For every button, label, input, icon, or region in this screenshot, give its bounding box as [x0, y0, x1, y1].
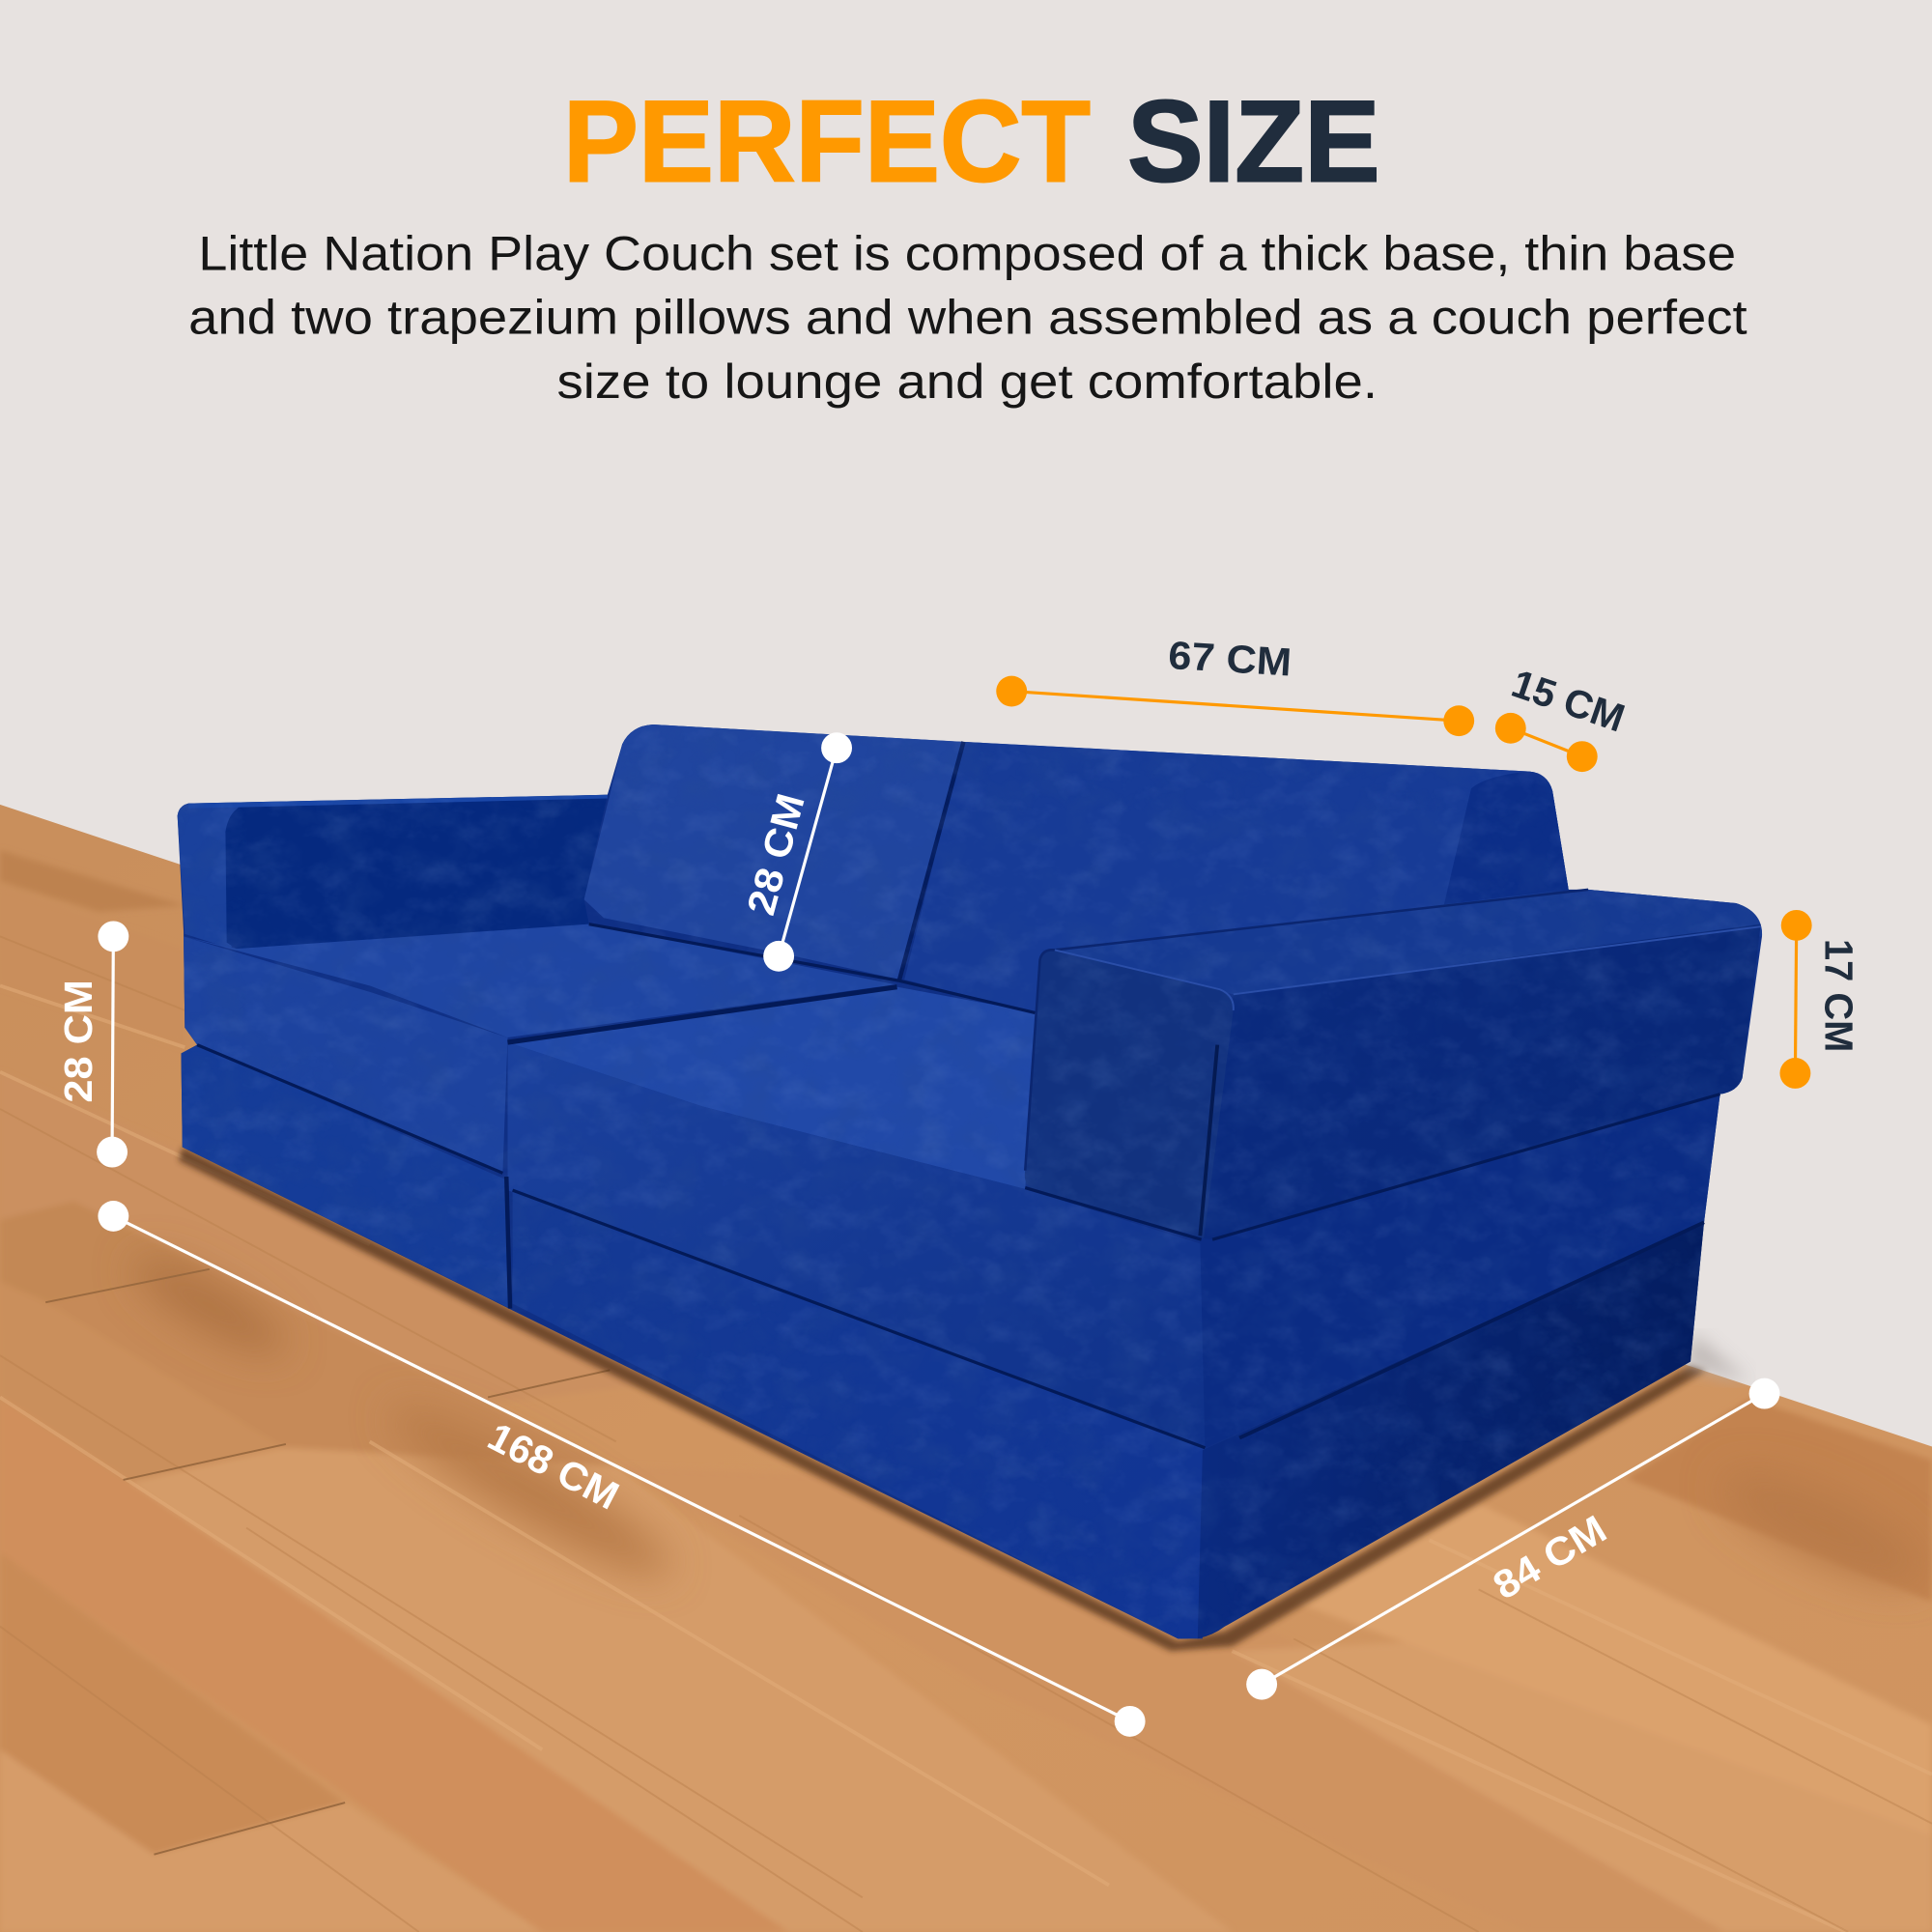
right arm side — [1200, 924, 1761, 1239]
title: PERFECT — [563, 76, 1091, 206]
sofa shadow on floor — [179, 1148, 1707, 1651]
wall shadow behind sofa — [1686, 1333, 1749, 1382]
zipper — [1200, 1045, 1217, 1236]
dimension: 67 CM: 67 CM — [1167, 633, 1293, 685]
dimension: 28 CM base height: 28 CM — [56, 980, 100, 1103]
floor plank seams — [45, 1269, 610, 1855]
floor plank bands — [0, 850, 1932, 1932]
left arm end — [178, 804, 241, 949]
description text: Little Nation Play Couch set is composed of a thick base, thin base — [198, 226, 1736, 280]
right seat front — [508, 1042, 1205, 1448]
dimension: 15 CM: 15 CM — [1506, 661, 1631, 741]
dimension: 28 CM cushion height: 28 CM — [738, 789, 813, 920]
dimension: 28 CM base height — [56, 921, 128, 1168]
couch seams — [197, 924, 1720, 1448]
velvet texture overlays — [160, 715, 1775, 1651]
dimension: 28 CM cushion height — [738, 732, 852, 972]
right seat top — [508, 987, 1037, 1189]
wooden floor — [0, 788, 1932, 1932]
description text: size to lounge and get comfortable. — [557, 355, 1378, 409]
dimension: 17 CM: 17 CM — [1817, 939, 1861, 1052]
floor dark wood patches — [141, 1259, 1893, 1590]
title: SIZE — [1127, 76, 1380, 206]
couch silhouette underlay — [178, 724, 1762, 1639]
dimension: 67 CM — [996, 633, 1474, 736]
dimension: 84 CM — [1246, 1378, 1779, 1700]
couch — [160, 715, 1775, 1651]
title — [563, 77, 1380, 207]
right arm top — [1040, 890, 1762, 994]
dimension: 168 CM: 168 CM — [481, 1414, 626, 1519]
left arm inner face — [225, 795, 608, 949]
floor grain lines — [0, 936, 1932, 1932]
back cushion: right — [904, 742, 1569, 1012]
description text — [188, 226, 1747, 409]
right arm front — [1025, 950, 1234, 1238]
left seat top — [184, 924, 895, 1037]
right arm outline — [1025, 890, 1588, 1171]
lower base: right front — [513, 1190, 1205, 1638]
dimension: 84 CM: 84 CM — [1486, 1506, 1614, 1608]
right arm top front edge — [1055, 926, 1761, 1010]
back cushion side face — [1444, 771, 1569, 904]
dimension: 17 CM — [1779, 910, 1861, 1089]
floor light plank edges — [0, 985, 1932, 1932]
description text: and two trapezium pillows and when assembled as a couch perfect — [188, 291, 1747, 345]
back cushion: left — [584, 724, 963, 980]
dimension: 15 CM — [1495, 661, 1631, 772]
right seat side — [1200, 1094, 1720, 1448]
lower base: left front — [182, 1045, 510, 1309]
cushion divider — [899, 742, 963, 980]
left seat front — [184, 936, 508, 1173]
dimension: 168 CM — [98, 1201, 1146, 1737]
lower base: end face — [1198, 1222, 1704, 1638]
